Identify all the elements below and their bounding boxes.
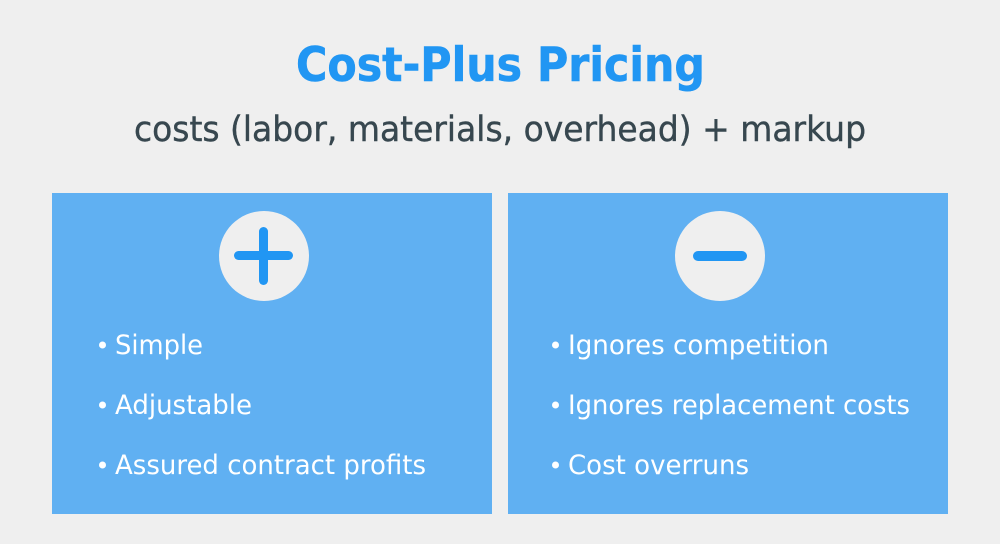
subtitle: formula: costs (labor, materials, overhead) + markup bbox=[134, 110, 866, 150]
list item: Simple: Simple bbox=[115, 330, 203, 361]
list item: Assured contract profits: Assured contract profits bbox=[115, 450, 426, 481]
title: Cost-Plus Pricing bbox=[296, 38, 705, 93]
list item: Cost overruns: Cost overruns bbox=[568, 450, 749, 481]
icon: plus bbox=[219, 211, 309, 301]
panel: advantages bbox=[52, 193, 492, 514]
list item: Adjustable: Adjustable bbox=[115, 390, 252, 421]
list item: Ignores replacement costs: Ignores replacement costs bbox=[568, 390, 910, 421]
panel: disadvantages bbox=[508, 193, 948, 514]
icon: minus bbox=[675, 211, 765, 301]
list item: Ignores competition: Ignores competition bbox=[568, 330, 829, 361]
